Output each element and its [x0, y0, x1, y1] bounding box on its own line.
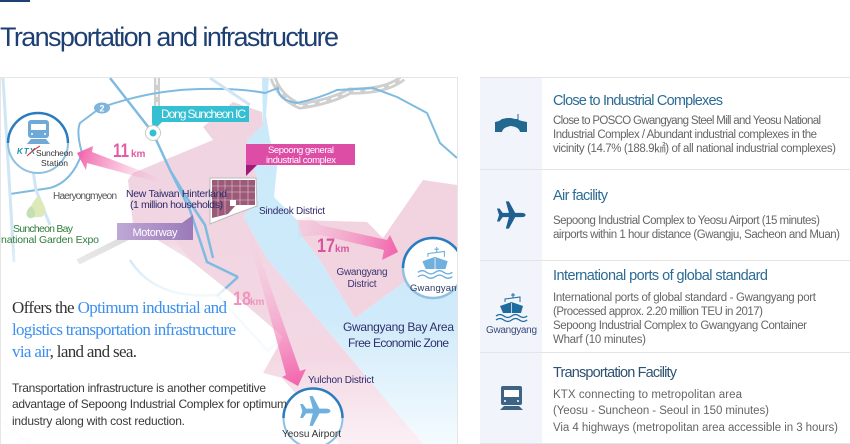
label: Gwangyang District: Gwangyang: [336, 267, 388, 278]
map: highways: [78, 78, 403, 262]
label: New Taiwan Hinterland: (1 million households): [130, 199, 223, 211]
panel: transportation map: km: [335, 244, 350, 255]
white fade over lower left of map: [1, 248, 282, 444]
headline: optimum infrastructure: [12, 298, 236, 361]
row: International ports of global standard: [486, 268, 817, 346]
icon: factory: [495, 114, 527, 132]
icon: Suncheon Station badge: Suncheon: [36, 148, 73, 158]
callout: Sepoong general industrial complex: [246, 144, 355, 176]
row: Close to Industrial Complexes: vicinity (14.7% (188.9㎢) of all national industrial complexes): [553, 142, 836, 155]
headline: optimum infrastructure: via air, land and sea.: [12, 342, 137, 361]
distance label: 18 km: 18: [233, 289, 251, 310]
row: International ports of global standard: Wharf (10 minutes): [553, 334, 646, 346]
row: Transportation Facility: KTX connecting to metropolitan area: [553, 389, 743, 401]
row: Close to Industrial Complexes: Close to POSCO Gwangyang Steel Mill and Yeosu National: [553, 115, 821, 127]
label: Suncheon Bay International Garden Expo: Suncheon Bay: [13, 223, 74, 235]
KTX logo: KTX: [17, 147, 36, 156]
distance label: 17 km: 17: [317, 236, 335, 257]
row: Transportation Facility: Transportation Facility: [553, 365, 678, 381]
arrow: 17 km to Gwangyang: [297, 217, 398, 260]
label: Yulchon District: Yulchon District: [308, 375, 374, 386]
label: Gwangyang Bay Area Free Economic Zone: [344, 322, 454, 347]
icon: Suncheon Station badge: Station: [41, 158, 68, 168]
panel: transportation map: km: [131, 149, 146, 160]
label: New Taiwan Hinterland: [126, 190, 226, 210]
row: International ports of global standard: (Processed approx. 2.20 million TEU in 2017): [553, 306, 763, 318]
callout: Dong Suncheon IC: [146, 106, 249, 140]
panel: transportation map: km: [250, 297, 265, 308]
row: International ports of global standard: Gwangyang: [486, 325, 537, 336]
title: Transportation and infrastructure: [0, 22, 339, 52]
icon: Gwangyang port badge: [403, 238, 463, 298]
icon: train: [500, 386, 523, 410]
label: New Taiwan Hinterland: New Taiwan Hinterland: [126, 188, 227, 200]
map: route 2 badge: 2: [99, 104, 105, 114]
map: route 2 badge: [94, 102, 110, 114]
text block: map description: industry along with cost reduction.: [12, 414, 185, 428]
icon: Gwangyang port badge: Gwangyang: [410, 283, 462, 294]
text block: map description: advantage of Sepoong Industrial Complex for optimum: [12, 397, 287, 411]
map: roads: [2, 78, 457, 346]
label: Sindeok District: Sindeok District: [259, 206, 325, 217]
label: Gwangyang District: District: [348, 279, 377, 290]
row: Air facility: [497, 188, 840, 241]
label: Haeryongmyeon: Haeryongmyeon: [53, 191, 117, 202]
icon: ship: [496, 293, 527, 322]
arrow: 18 km to Yeosu Airport: [258, 267, 306, 386]
callout: Sepoong general industrial complex: industrial complex: [266, 155, 336, 166]
label: Suncheon Bay International Garden Expo: [1, 224, 98, 245]
text block: map description: [12, 381, 287, 428]
row: Close to Industrial Complexes: Close to Industrial Complexes: [553, 93, 723, 109]
row: Transportation Facility: [500, 365, 838, 434]
icon: train: [27, 120, 50, 144]
map: water and bay: [243, 78, 457, 444]
headline: optimum infrastructure: logistics transportation infrastructure: [12, 320, 236, 339]
icon: Yeosu Airport badge: [282, 388, 342, 444]
row: Air facility: Air facility: [553, 188, 609, 204]
distance label: 11 km: 11: [113, 141, 129, 162]
panel: transportation map: [0, 78, 463, 444]
label: Gwangyang District: [337, 268, 387, 287]
icon: ship: [418, 247, 452, 278]
icon: plane: [300, 396, 330, 426]
row: Transportation Facility: Via 4 highways (metropolitan area accessible in 3 hours): [553, 422, 838, 434]
icon: tree: [26, 196, 45, 218]
row: International ports of global standard: International ports of global standard: [553, 268, 768, 284]
icon: Yeosu Airport badge: Yeosu Airport: [282, 429, 341, 440]
text block: map description: Transportation infrastructure is another competitive: [12, 381, 266, 395]
row: Air facility: airports within 1 hour distance (Gwangju, Sacheon and Muan): [553, 229, 840, 241]
arrow: 11 km to Suncheon Station: [77, 146, 152, 180]
row: Air facility: Sepoong Industrial Complex to Yeosu Airport (15 minutes): [553, 215, 820, 227]
callout: Dong Suncheon IC: Dong Suncheon IC: [161, 107, 246, 121]
title accent bar: [0, 0, 30, 2]
headline: optimum infrastructure: Offers the Optimum industrial and: [12, 298, 228, 317]
row: International ports of global standard: International ports of global standard - Gwangyang port: [553, 292, 817, 304]
callout: Motorway: [117, 215, 193, 240]
row: Close to Industrial Complexes: Industrial Complex / Abundant industrial complexes in the: [553, 129, 817, 141]
row: Close to Industrial Complexes: [495, 93, 836, 155]
icon: Suncheon Station badge: [8, 113, 73, 173]
label: Gwangyang Bay Area Free Economic Zone: Free Economic Zone: [348, 336, 449, 350]
industrial complex site plan: [210, 178, 257, 224]
panel: facilities list: [480, 78, 850, 444]
callout: Motorway: Motorway: [132, 227, 178, 239]
icon: plane: [497, 201, 526, 229]
map: pink land regions: [128, 102, 457, 444]
callout: Sepoong general industrial complex: Sepoong general: [268, 145, 334, 156]
label: Gwangyang Bay Area Free Economic Zone: Gwangyang Bay Area: [343, 320, 454, 334]
row: International ports of global standard: Sepoong Industrial Complex to Gwangyang Container: [553, 320, 807, 332]
row: Transportation Facility: (Yeosu - Suncheon - Seoul in 150 minutes): [553, 405, 769, 417]
